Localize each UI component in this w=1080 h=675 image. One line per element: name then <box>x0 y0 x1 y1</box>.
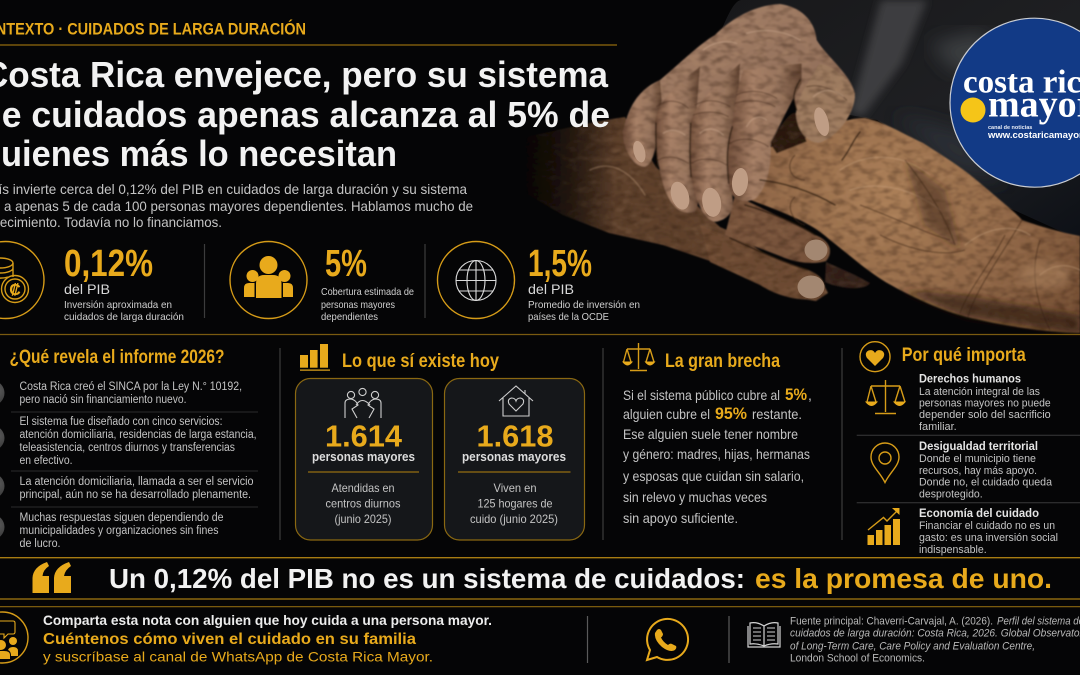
source citation: Fuente principal: Chaverri-Carvajal, A. (2026). <box>790 615 993 627</box>
item: desigualdad territorial: Donde no, el cuidado queda <box>919 477 1053 489</box>
panel: la gran brecha: restante. <box>752 406 802 422</box>
card: hogares de cuido <box>444 378 584 540</box>
item: economía del cuidado: gasto: es una inversión social <box>919 532 1058 544</box>
heading: ¿Qué revela el informe 2026? <box>10 347 224 368</box>
icon: coins: ₡ <box>9 282 21 299</box>
panel: la gran brecha: sin apoyo suficiente. <box>623 510 738 526</box>
stat: 5%: 5% <box>325 243 367 285</box>
stat: 0,12%: del PIB <box>64 281 110 297</box>
panel: informe 2026: La atención domiciliaria, llamada a ser el servicio <box>20 476 254 488</box>
stat: 0,12%: Inversión aproximada en <box>64 299 172 311</box>
card: centros diurnos: personas mayores <box>312 450 415 464</box>
panel: la gran brecha: sin relevo y muchas veces <box>623 489 767 505</box>
panel: informe 2026: principal, aún no se ha desarrollado plenamente. <box>20 489 251 501</box>
panel: informe 2026 <box>0 347 258 550</box>
item: economía del cuidado <box>868 508 1058 556</box>
item: derechos humanos: familiar. <box>919 421 957 433</box>
item: desigualdad territorial: desprotegido. <box>919 489 983 501</box>
panel: lo que sí existe hoy <box>296 344 584 540</box>
lower finger B <box>700 225 825 299</box>
stat: 1,5%: Promedio de inversión en <box>528 299 640 311</box>
left forearm <box>520 117 828 301</box>
right hand <box>740 118 1080 333</box>
stat: 0,12% <box>0 242 184 323</box>
icon: group of people <box>345 388 381 418</box>
item: derechos humanos: depender solo del sacrificio <box>919 409 1051 421</box>
call to action <box>0 612 492 665</box>
quote banner: Un 0,12% del PIB no es un sistema de cuidados: <box>109 563 745 594</box>
panel: la gran brecha: 95% <box>715 404 747 423</box>
heading: Lo que sí existe hoy <box>342 351 499 372</box>
heading: Por qué importa <box>902 345 1026 366</box>
icon: coins <box>0 242 44 318</box>
stat: 1,5%: países de la OCDE <box>528 311 609 323</box>
photo: elderly hands <box>520 0 1080 333</box>
card: hogares de cuido: cuido (junio 2025) <box>470 512 558 526</box>
panel: la gran brecha: 5% <box>785 385 807 404</box>
item: desigualdad territorial: recursos, hay más apoyo. <box>919 465 1037 477</box>
item: derechos humanos: Derechos humanos <box>919 374 1021 386</box>
fingernails <box>631 106 832 218</box>
source citation <box>790 615 1080 665</box>
item: derechos humanos: La atención integral de las <box>919 386 1040 398</box>
call to action: Comparta esta nota con alguien que hoy cuida a una persona mayor. <box>43 613 492 628</box>
logo: Costa Rica Mayor <box>950 18 1080 187</box>
stat: 1,5%: 1,5% <box>528 243 592 285</box>
item: derechos humanos: personas mayores no puede <box>919 398 1051 410</box>
icon: map pin <box>871 443 899 482</box>
card: hogares de cuido: personas mayores <box>462 450 566 464</box>
panel: informe 2026: Muchas respuestas siguen dependiendo de <box>20 512 224 524</box>
panel: la gran brecha: , <box>808 387 812 403</box>
card: centros diurnos: centros diurnos <box>326 497 400 511</box>
panel: informe 2026: municipalidades y organizaciones sin fines <box>20 525 219 537</box>
panel: informe 2026: atención domiciliaria, residencias de larga estancia, <box>20 429 256 441</box>
panel: la gran brecha: y esposas que cuidan sin salario, <box>623 468 804 484</box>
icon: book <box>748 623 780 647</box>
panel: la gran brecha: alguien cubre el <box>623 406 710 422</box>
back finger <box>825 262 870 288</box>
icon: people <box>230 242 307 318</box>
quote banner: es la promesa de uno. <box>755 563 1052 594</box>
source citation: London School of Economics. <box>790 653 925 665</box>
item: economía del cuidado: Financiar el cuidado no es un <box>919 520 1055 532</box>
soft light and shadow on right hand <box>900 160 1080 333</box>
stat: 1,5% <box>438 242 640 323</box>
panel: la gran brecha <box>623 343 812 526</box>
intro paragraph <box>0 181 473 230</box>
icon: WhatsApp <box>647 619 688 660</box>
panel: informe 2026: pero nació sin financiamiento nuevo. <box>20 394 186 406</box>
source citation: of Long-Term Care, Care Policy and Evaluation Centre, <box>790 640 1035 652</box>
icon: heart <box>860 342 890 372</box>
stat: 1,5%: del PIB <box>528 281 574 297</box>
icon: conversation <box>0 612 28 663</box>
call to action: y suscríbase al canal de WhatsApp de Costa Rica Mayor. <box>43 649 433 665</box>
panel: informe 2026: Costa Rica creó el SINCA por la Ley N.° 10192, <box>20 381 242 393</box>
skin folds and creases <box>730 132 860 270</box>
icon: quote marks <box>32 562 71 593</box>
card: centros diurnos <box>296 378 432 540</box>
icon: house with heart <box>499 386 533 416</box>
item: desigualdad territorial <box>871 441 1053 501</box>
card: centros diurnos: Atendidas en <box>332 481 394 495</box>
title: Costa Rica envejece, pero su sistema <box>0 54 609 95</box>
item: derechos humanos <box>866 374 1051 433</box>
icon: growth chart <box>868 508 900 545</box>
panel: informe 2026: El sistema fue diseñado con cinco servicios: <box>20 416 222 428</box>
item: desigualdad territorial: Donde el municipio tiene <box>919 453 1036 465</box>
card: hogares de cuido: 125 hogares de <box>478 497 553 511</box>
stat: 5% <box>230 242 414 323</box>
panel: la gran brecha: y género: madres, hijas, hermanas <box>623 446 810 462</box>
stat: 0,12%: cuidados de larga duración <box>64 311 184 323</box>
lower finger A <box>725 195 830 263</box>
logo: Costa Rica Mayor: canal de noticias <box>988 125 1032 131</box>
stat: 5%: personas mayores <box>321 299 395 311</box>
panel: por qué importa <box>857 342 1080 556</box>
panel: informe 2026: de lucro. <box>20 538 60 550</box>
panel: informe 2026: en efectivo. <box>20 455 72 467</box>
item: desigualdad territorial: Desigualdad territorial <box>919 441 1038 453</box>
icon: bars <box>300 344 330 371</box>
item: economía del cuidado: Economía del cuidado <box>919 508 1039 520</box>
stat: 5%: dependientes <box>321 311 378 323</box>
panel: informe 2026: teleasistencia, centros diurnos y transferencias <box>20 442 235 454</box>
stat: 0,12%: 0,12% <box>64 243 153 285</box>
upper hand <box>623 4 855 222</box>
stat: 5%: Cobertura estimada de <box>321 286 414 298</box>
icon: scales <box>623 343 654 370</box>
item: economía del cuidado: indispensable. <box>919 544 987 556</box>
card: hogares de cuido: Viven en <box>494 481 536 495</box>
title <box>0 54 610 174</box>
quote banner <box>32 562 1052 594</box>
icon: scales <box>866 380 905 414</box>
card: centros diurnos: 1.614 <box>325 419 403 454</box>
heading: La gran brecha <box>665 351 780 372</box>
card: centros diurnos: (junio 2025) <box>334 512 392 526</box>
panel: la gran brecha: Si el sistema público cubre al <box>623 387 780 403</box>
panel: la gran brecha: Ese alguien suele tener nombre <box>623 426 798 442</box>
card: hogares de cuido: 1.618 <box>476 419 554 454</box>
icon: globe <box>438 242 514 318</box>
call to action: Cuéntenos cómo viven el cuidado en su familia <box>43 631 416 648</box>
